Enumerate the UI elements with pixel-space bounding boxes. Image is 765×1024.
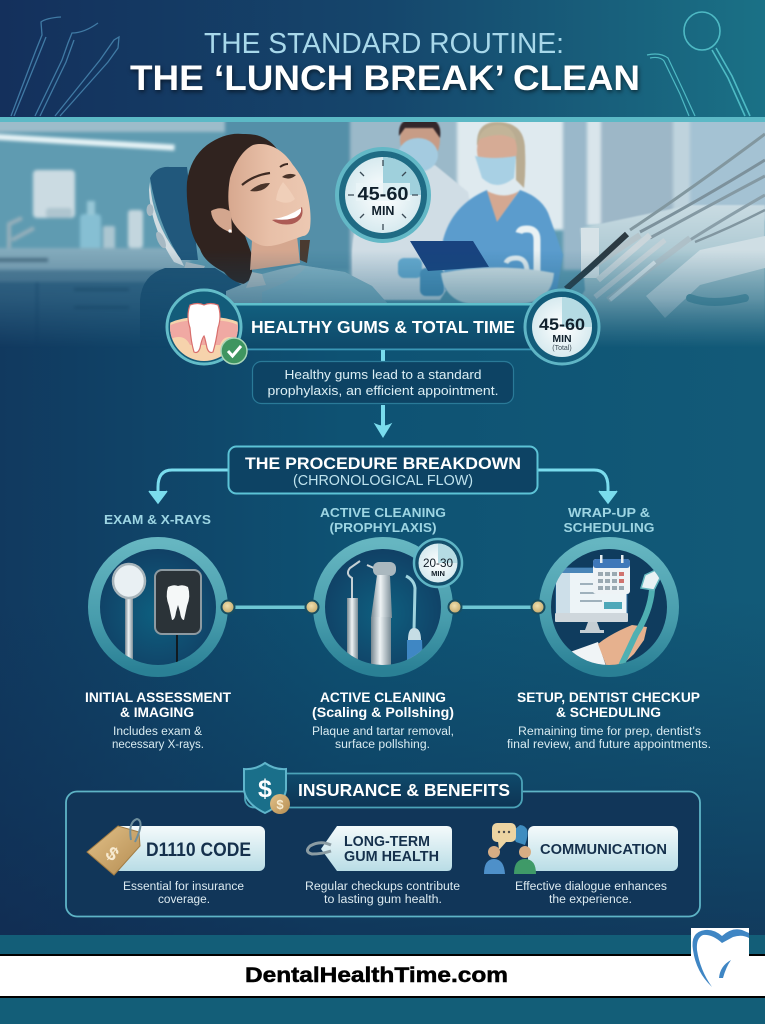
header banner	[0, 0, 765, 122]
section heading: procedure breakdown: THE PROCEDURE BREAKDOWN	[245, 454, 521, 473]
icon circle: mirror and x-ray	[94, 543, 222, 671]
text: insurance coverage: Essential for insurance	[123, 881, 244, 893]
step label: wrap-up and scheduling: WRAP-UP &	[568, 505, 650, 520]
icon: computer monitor	[555, 568, 628, 633]
photo: dental clinic scene	[0, 122, 765, 341]
text: lasting gum health: Regular checkups contribute	[305, 881, 460, 893]
card: communication: COMMUNICATION	[540, 842, 667, 858]
step text: setup and scheduling: Remaining time for prep, dentist's	[518, 726, 701, 738]
icon: dental mirror	[113, 564, 145, 666]
timer badge: 45-60 min total: MIN	[552, 333, 572, 345]
icon: shield with dollar: $	[276, 797, 284, 812]
step text: active cleaning: Plaque and tartar removal,	[312, 726, 454, 738]
timer badge: 45-60 min on photo: 45-60	[358, 184, 408, 204]
timer badge: 45-60 min on photo: MIN	[372, 204, 394, 218]
timer badge: 45-60 min on photo	[337, 149, 429, 241]
text: insurance coverage	[123, 881, 244, 906]
icon: hand holding toothbrush	[572, 570, 660, 665]
icon: price tag	[87, 819, 141, 875]
step text: active cleaning	[312, 690, 454, 751]
banner: healthy gums and total time	[228, 303, 534, 350]
step text: setup and scheduling	[507, 690, 711, 751]
connector to description	[381, 350, 385, 361]
description box: prophylaxis, an efficient appointment.	[268, 383, 498, 398]
icon circle: scheduling	[545, 543, 673, 672]
step text: active cleaning: ACTIVE CLEANING	[320, 690, 446, 705]
step text: setup and scheduling: & SCHEDULING	[556, 705, 661, 720]
footer band	[0, 935, 765, 1024]
icon circle: cleaning tools	[319, 539, 462, 671]
step text: initial assessment	[85, 690, 232, 751]
card: communication	[484, 823, 678, 874]
icon: shield with dollar	[244, 763, 290, 814]
card: D1110 code: D1110 CODE	[146, 839, 251, 861]
heading pill: INSURANCE & BENEFITS	[298, 780, 510, 800]
timer badge: 45-60 min total: (Total)	[552, 345, 572, 352]
timer badge: 20-30 min: 20-30	[423, 556, 453, 570]
step text: active cleaning: surface pollshing.	[335, 739, 430, 751]
text: lasting gum health: to lasting gum health.	[324, 894, 442, 906]
icon: shield with dollar: $	[258, 775, 272, 803]
timer badge: 45-60 min total	[525, 290, 599, 364]
timer badge: 20-30 min: MIN	[431, 569, 445, 578]
text: effective dialogue: Effective dialogue enhances	[515, 881, 667, 893]
description box: Healthy gums lead to a standard	[284, 367, 482, 382]
step text: initial assessment: Includes exam &	[113, 726, 202, 738]
icon: check badge	[221, 338, 247, 364]
arrow: branch to exam step	[149, 470, 228, 503]
clipboard	[410, 241, 489, 271]
step label: wrap-up and scheduling	[564, 505, 654, 535]
text: lasting gum health	[305, 881, 460, 906]
step label: active cleaning: (PROPHYLAXIS)	[330, 520, 436, 535]
arrow: down to procedure breakdown	[375, 405, 391, 437]
step label: active cleaning: ACTIVE CLEANING	[320, 505, 446, 520]
icon: dental handpiece	[367, 562, 396, 669]
step text: setup and scheduling: final review, and future appointments.	[507, 739, 711, 751]
connector: step 2 to step 3	[448, 600, 544, 614]
icon: tooth in gum with check	[165, 290, 247, 365]
patient: smiling woman	[186, 134, 387, 303]
dental chair	[140, 166, 242, 321]
heading pill	[245, 774, 522, 808]
section heading: procedure breakdown: (CHRONOLOGICAL FLOW)	[293, 473, 473, 489]
step text: setup and scheduling: SETUP, DENTIST CHECKUP	[517, 690, 700, 705]
card: long-term gum health	[307, 826, 452, 871]
card: long-term gum health: GUM HEALTH	[344, 848, 439, 865]
sink and faucet	[441, 229, 554, 304]
step text: active cleaning: (Scaling & Pollshing)	[312, 705, 454, 720]
icon: scaler	[347, 561, 360, 668]
heading text: HEALTHY GUMS & TOTAL TIME	[251, 317, 515, 337]
description box	[252, 362, 514, 404]
section heading: procedure breakdown	[228, 446, 538, 494]
title line 1: THE STANDARD ROUTINE:	[204, 28, 564, 60]
logo: tooth mark	[691, 928, 749, 988]
connector: step 1 to step 2	[222, 600, 318, 614]
footer website text: DentalHealthTime.com	[245, 964, 508, 987]
timer badge: 45-60 min total: 45-60	[539, 316, 585, 334]
card: D1110 code	[87, 819, 265, 875]
step label: exam and x-rays: EXAM & X-RAYS	[104, 512, 211, 527]
male clinician	[352, 116, 478, 300]
text: effective dialogue	[515, 881, 667, 906]
icon: two people talking	[484, 823, 536, 874]
clinic background wall and counter	[0, 122, 765, 334]
step label: active cleaning	[320, 505, 446, 535]
icon: x-ray sensor with tooth	[155, 570, 201, 666]
step text: initial assessment: & IMAGING	[120, 705, 194, 720]
timer badge: 20-30 min	[414, 539, 462, 587]
dental unit and handpieces	[564, 132, 765, 328]
icon: price tag: $	[101, 843, 123, 866]
text: insurance coverage: coverage.	[158, 894, 210, 906]
step text: initial assessment: necessary X-rays.	[112, 739, 204, 751]
nurse	[398, 122, 563, 296]
text: effective dialogue: the experience.	[549, 894, 632, 906]
step text: initial assessment: INITIAL ASSESSMENT	[85, 690, 232, 705]
title line 2: THE ‘LUNCH BREAK’ CLEAN	[130, 59, 640, 98]
icon: outline mirror and probe right	[647, 12, 750, 116]
arrow: branch to wrap-up step	[538, 470, 617, 503]
icon: water tool	[406, 576, 423, 666]
icon: outline dental tools left	[11, 17, 119, 116]
panel: insurance and benefits	[66, 763, 700, 916]
icon: calendar	[593, 555, 630, 594]
step label: wrap-up and scheduling: SCHEDULING	[564, 520, 654, 535]
card: long-term gum health: LONG-TERM	[344, 833, 430, 850]
icon: link ring	[307, 843, 331, 854]
